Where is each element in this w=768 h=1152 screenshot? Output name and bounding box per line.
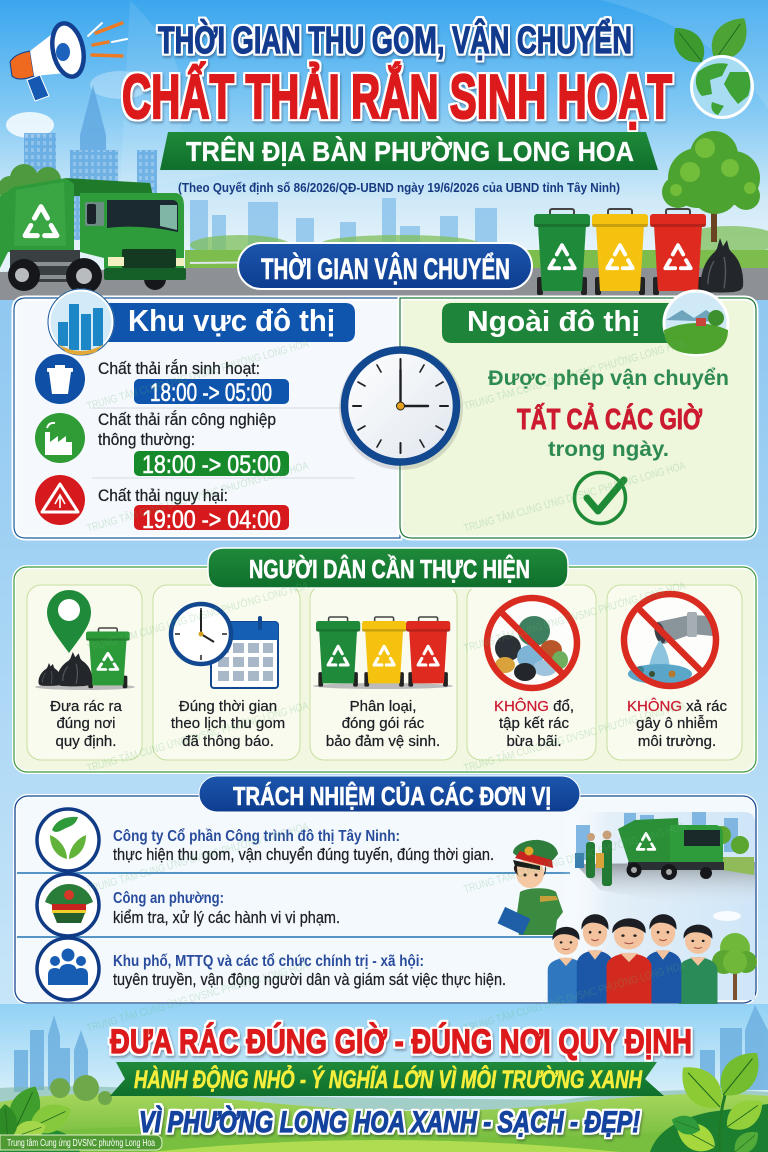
time: household waste: 18:00 -> 05:00 [150, 379, 272, 407]
icon: tree [662, 131, 760, 242]
watermark: TRUNG TÂM CUNG ỨNG DVSNC PHƯỜNG LONG HOA [462, 699, 687, 775]
icon: calendar [211, 616, 278, 688]
text: card 1: Đưa rác ra [50, 698, 123, 715]
text: card 5: KHÔNG xả rác [627, 698, 727, 715]
panel: residents should [14, 567, 756, 772]
watermark: TRUNG TÂM CUNG ỨNG DVSNC PHƯỜNG LONG HOA [462, 337, 687, 413]
icon: police cap [37, 874, 99, 936]
footer slogan 2: VÌ PHƯỜNG LONG HOA XANH - SẠCH - ĐẸP! [139, 1105, 640, 1139]
text: card 1: quy định. [56, 733, 116, 750]
card 2 [153, 585, 300, 760]
text: card 3: bảo đảm vệ sinh. [326, 733, 440, 750]
watermark: TRUNG TÂM CUNG ỨNG DVSNC PHƯỜNG LONG HOA [85, 959, 310, 1035]
text: card 3: đóng gói rác [342, 715, 425, 732]
text: household waste: Chất thải rắn sinh hoạt: [98, 359, 260, 378]
subtitle banner: TRÊN ĐỊA BÀN PHƯỜNG LONG HOA [186, 136, 634, 167]
text: card 2: theo lịch thu gom [171, 715, 285, 732]
illustration: truck scene [560, 812, 755, 1000]
icon: globe with leaves [665, 9, 757, 119]
urban header pill: Khu vực đô thị [128, 303, 335, 338]
time: hazardous waste: 19:00 -> 04:00 [142, 506, 281, 534]
text: industrial waste line 2: thông thường: [98, 431, 195, 449]
text: card 5: môi trường. [638, 733, 716, 750]
icon: megaphone [10, 20, 88, 101]
text: card 4: bừa bãi. [506, 733, 562, 750]
decoration: left leaves [0, 1080, 80, 1152]
watermark: TRUNG TÂM CUNG ỨNG DVSNC PHƯỜNG LONG HOA [462, 459, 687, 535]
icon: household waste [35, 354, 85, 404]
heading pill: transport time: THỜI GIAN VẬN CHUYỂN [261, 252, 510, 286]
panel: outside urban [400, 291, 756, 538]
icon: people [37, 938, 99, 1000]
icon: countryside circle [664, 291, 728, 355]
text: police: Công an phường: [113, 890, 224, 907]
icon: no dumping [486, 597, 578, 689]
icon: hazardous [35, 475, 85, 525]
background: header sky scene [0, 0, 768, 300]
heading pill: responsibilities [199, 776, 580, 812]
icon: bags and bin [38, 628, 130, 688]
text: card 4: KHÔNG đổ, [494, 698, 574, 715]
legal note: (Theo Quyết định số 86/2026/QĐ-UBND ngày 19/6/2026 của UBND tỉnh Tây Ninh) [178, 180, 620, 195]
illustration: tree [712, 933, 757, 1000]
text: card 4: tập kết rác [499, 715, 570, 732]
heading pill: residents should: NGƯỜI DÂN CẦN THỰC HIỆN [249, 554, 530, 584]
icon: black bag [701, 238, 743, 293]
watermark: TRUNG TÂM CUNG ỨNG DVSNC PHƯỜNG LONG HOA [85, 820, 310, 896]
text: neighbourhood: Khu phố, MTTQ và các tổ chức chính trị - xã hội: [113, 953, 424, 970]
illustration: group of people [548, 914, 718, 1005]
small truck [618, 818, 724, 880]
footer banner [110, 1062, 664, 1096]
outside header pill: Ngoài đô thị [467, 306, 640, 338]
watermark [85, 337, 687, 1035]
heading pill: residents should [208, 548, 568, 588]
watermark: TRUNG TÂM CUNG ỨNG DVSNC PHƯỜNG LONG HOA [85, 699, 310, 775]
text: hazardous waste: Chất thải nguy hại: [98, 487, 228, 505]
footer tag [0, 1135, 162, 1150]
text: in a day: trong ngày. [548, 438, 669, 461]
outside header pill [442, 303, 690, 343]
text: card 1: đúng nơi [56, 715, 116, 732]
icon: small clock [171, 604, 231, 664]
panel: urban area [14, 289, 400, 538]
text: neighbourhood duty: tuyên truyền, vận động người dân và giám sát việc thực hiện. [113, 971, 506, 989]
card 5 [607, 585, 742, 760]
watermark: TRUNG TÂM CUNG ỨNG DVSNC PHƯỜNG LONG HOA [462, 820, 687, 896]
text: company: Công ty Cổ phần Công trình đô thị Tây Ninh: [113, 828, 400, 845]
time: industrial waste: 18:00 -> 05:00 [142, 451, 281, 479]
icon: location pin [47, 590, 91, 653]
card 4 [467, 585, 596, 760]
heading pill: transport time [238, 243, 532, 289]
decoration: right leaves [650, 1043, 768, 1152]
text: all hours: TẤT CẢ CÁC GIỜ [517, 402, 702, 436]
heading pill: responsibilities: TRÁCH NHIỆM CỦA CÁC ĐƠN VỊ [233, 780, 551, 811]
text: police duty: kiểm tra, xử lý các hành vi vi phạm. [113, 909, 340, 927]
text: card 5: gây ô nhiễm [636, 715, 718, 732]
watermark: TRUNG TÂM CUNG ỨNG DVSNC PHƯỜNG LONG HOA [462, 959, 687, 1035]
footer scene [0, 1004, 768, 1152]
text: card 3: Phân loại, [350, 698, 416, 715]
icon: three bins [316, 617, 450, 687]
text: card 2: đã thông báo. [182, 733, 274, 750]
text: company duty: thực hiện thu gom, vận chuyển đúng tuyến, đúng thời gian. [113, 846, 494, 864]
icon: no discharge [624, 594, 716, 686]
watermark: TRUNG TÂM CUNG ỨNG DVSNC PHƯỜNG LONG HOA [85, 579, 310, 655]
card 1 [27, 585, 142, 760]
footer tag: Trung tâm Cung ứng DVSNC phường Long Hoa [7, 1138, 155, 1149]
card 3 [310, 585, 457, 760]
text: card 2: Đúng thời gian [179, 698, 277, 715]
icon: three recycling bins [534, 209, 706, 295]
icon: factory [35, 413, 85, 463]
illustration: officer [498, 840, 563, 935]
workers [575, 830, 612, 886]
icon: city circle [48, 289, 114, 355]
icon: circular leaf [37, 809, 99, 871]
watermark: TRUNG TÂM CUNG ỨNG DVSNC PHƯỜNG LONG HOA [85, 459, 310, 535]
icon: garbage truck [0, 178, 186, 294]
text: industrial waste: Chất thải rắn công nghiệp [98, 410, 276, 429]
icon: check mark [574, 472, 626, 524]
watermark: TRUNG TÂM CUNG ỨNG DVSNC PHƯỜNG LONG HOA [462, 579, 687, 655]
icon: clock [339, 346, 463, 470]
icon: megaphone sparks [88, 23, 127, 56]
watermark: TRUNG TÂM CUNG ỨNG DVSNC PHƯỜNG LONG HOA [85, 337, 310, 413]
panel: responsibilities [15, 796, 757, 1005]
text: allowed: Được phép vận chuyển [488, 367, 729, 390]
